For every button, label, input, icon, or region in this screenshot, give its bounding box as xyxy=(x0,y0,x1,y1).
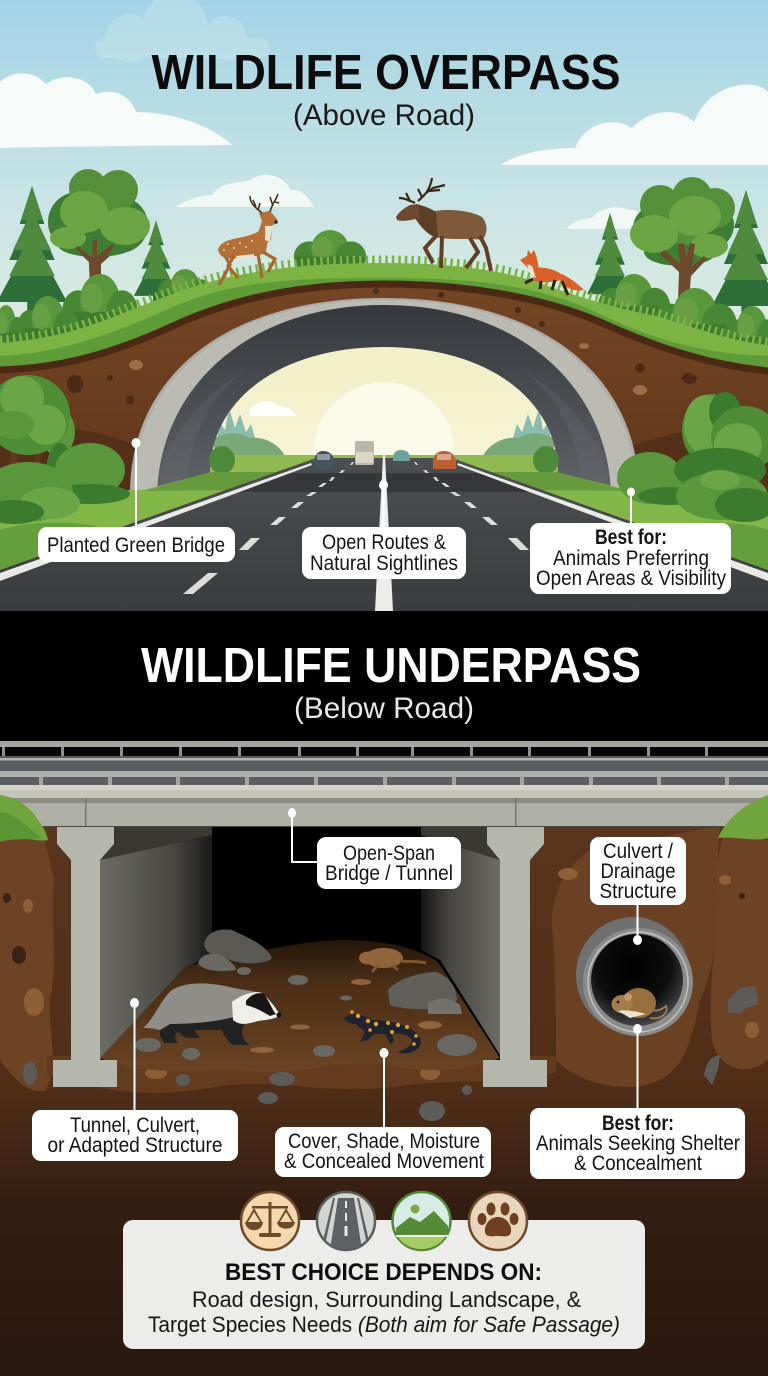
label: best for open areas: Best for: xyxy=(595,526,667,549)
label: best for open areas xyxy=(530,488,731,594)
label: open-span bridge: Open-Span xyxy=(343,842,435,865)
ground band below tunnel xyxy=(46,1056,556,1093)
icon: fox xyxy=(520,250,584,295)
icon: road xyxy=(317,1192,375,1250)
icon: deciduous tree right xyxy=(630,177,735,300)
label: cover shade moisture: & Concealed Movement xyxy=(284,1150,484,1173)
title: overpass: (Above Road) xyxy=(293,99,475,132)
tunnel opening view xyxy=(210,347,558,472)
label: best for shelter: Best for: xyxy=(602,1112,674,1135)
right tunnel wall xyxy=(421,835,500,1055)
label: cover shade moisture xyxy=(275,1048,491,1177)
label: best for shelter xyxy=(530,1024,745,1179)
icon: elk xyxy=(396,178,491,271)
clouds xyxy=(0,0,768,229)
label: open-span bridge: Bridge / Tunnel xyxy=(325,862,453,885)
left soil bank xyxy=(0,820,54,1091)
icon: landscape xyxy=(392,1192,450,1250)
grass hill top xyxy=(0,261,768,372)
label: cover shade moisture: Cover, Shade, Moisture xyxy=(288,1130,480,1153)
grass tufts xyxy=(0,795,768,842)
soil layer under hill xyxy=(0,281,768,500)
road deck and guardrails xyxy=(0,741,768,827)
callout text: Target Species Needs (Both aim for Safe Passage) xyxy=(148,1312,620,1337)
label: best for shelter: & Concealment xyxy=(574,1152,702,1175)
foreground trees right xyxy=(617,392,768,522)
icon: deciduous tree left xyxy=(48,169,150,287)
label: open routes: Open Routes & xyxy=(322,531,446,554)
title: underpass: WILDLIFE UNDERPASS xyxy=(141,639,641,693)
tunnel interior xyxy=(100,826,500,1072)
panel: underpass title band xyxy=(0,611,768,741)
label: culvert drainage: Culvert / xyxy=(603,840,673,863)
soil background xyxy=(0,741,768,1376)
label: culvert drainage xyxy=(590,837,686,945)
label: culvert drainage: Structure xyxy=(600,880,676,903)
label: culvert drainage: Drainage xyxy=(600,860,676,883)
icon: paw print xyxy=(469,1192,527,1250)
label: best for open areas: Animals Preferring xyxy=(553,547,709,570)
icon: tunnel rat xyxy=(359,948,426,972)
soil stones xyxy=(3,868,759,1121)
tunnel floor xyxy=(100,940,500,1072)
label: tunnel culvert xyxy=(32,998,238,1161)
icon: mouse xyxy=(612,988,667,1018)
title: overpass xyxy=(152,46,620,132)
label: open routes: Natural Sightlines xyxy=(310,552,458,575)
highway xyxy=(0,441,768,611)
concrete pillars xyxy=(53,827,547,1087)
label: best for shelter: Animals Seeking Shelter xyxy=(536,1132,740,1155)
vehicles xyxy=(314,441,456,469)
sky background xyxy=(0,0,768,611)
callout text xyxy=(148,1287,620,1337)
bushes at tunnel mouth xyxy=(209,446,559,474)
culvert pipe xyxy=(576,917,693,1036)
label: planted green bridge xyxy=(38,438,235,562)
rocks xyxy=(135,930,477,1060)
roadside grass xyxy=(0,460,768,572)
icon: deer xyxy=(218,194,279,285)
icon: badger xyxy=(143,983,282,1045)
shrubs behind hill xyxy=(0,230,768,354)
callout heading: BEST CHOICE DEPENDS ON: xyxy=(225,1259,542,1286)
title: underpass: (Below Road) xyxy=(294,692,474,725)
foreground trees left xyxy=(0,375,130,524)
icon: spotted salamander xyxy=(344,1010,421,1053)
label: tunnel culvert: or Adapted Structure xyxy=(48,1134,222,1157)
panel: overpass scene xyxy=(0,0,768,611)
background trees right xyxy=(587,177,768,320)
concrete arch bridge xyxy=(130,298,636,490)
label: open-span bridge xyxy=(288,808,461,889)
panel: best choice callout xyxy=(123,1192,645,1349)
background trees left xyxy=(0,169,178,316)
label: planted green bridge: Planted Green Bridge xyxy=(47,534,225,557)
right soil bank xyxy=(711,820,768,1069)
left tunnel wall xyxy=(100,835,212,1060)
label: tunnel culvert: Tunnel, Culvert, xyxy=(70,1114,200,1137)
title: overpass: WILDLIFE OVERPASS xyxy=(152,46,620,100)
label: best for open areas: Open Areas & Visibility xyxy=(536,567,726,590)
label: open routes xyxy=(302,480,466,579)
panel: underpass scene xyxy=(0,741,768,1376)
title: underpass xyxy=(141,639,641,725)
callout text: Road design, Surrounding Landscape, & xyxy=(192,1287,581,1312)
right soil mass xyxy=(552,826,720,1087)
icon: balance scales xyxy=(241,1192,299,1250)
